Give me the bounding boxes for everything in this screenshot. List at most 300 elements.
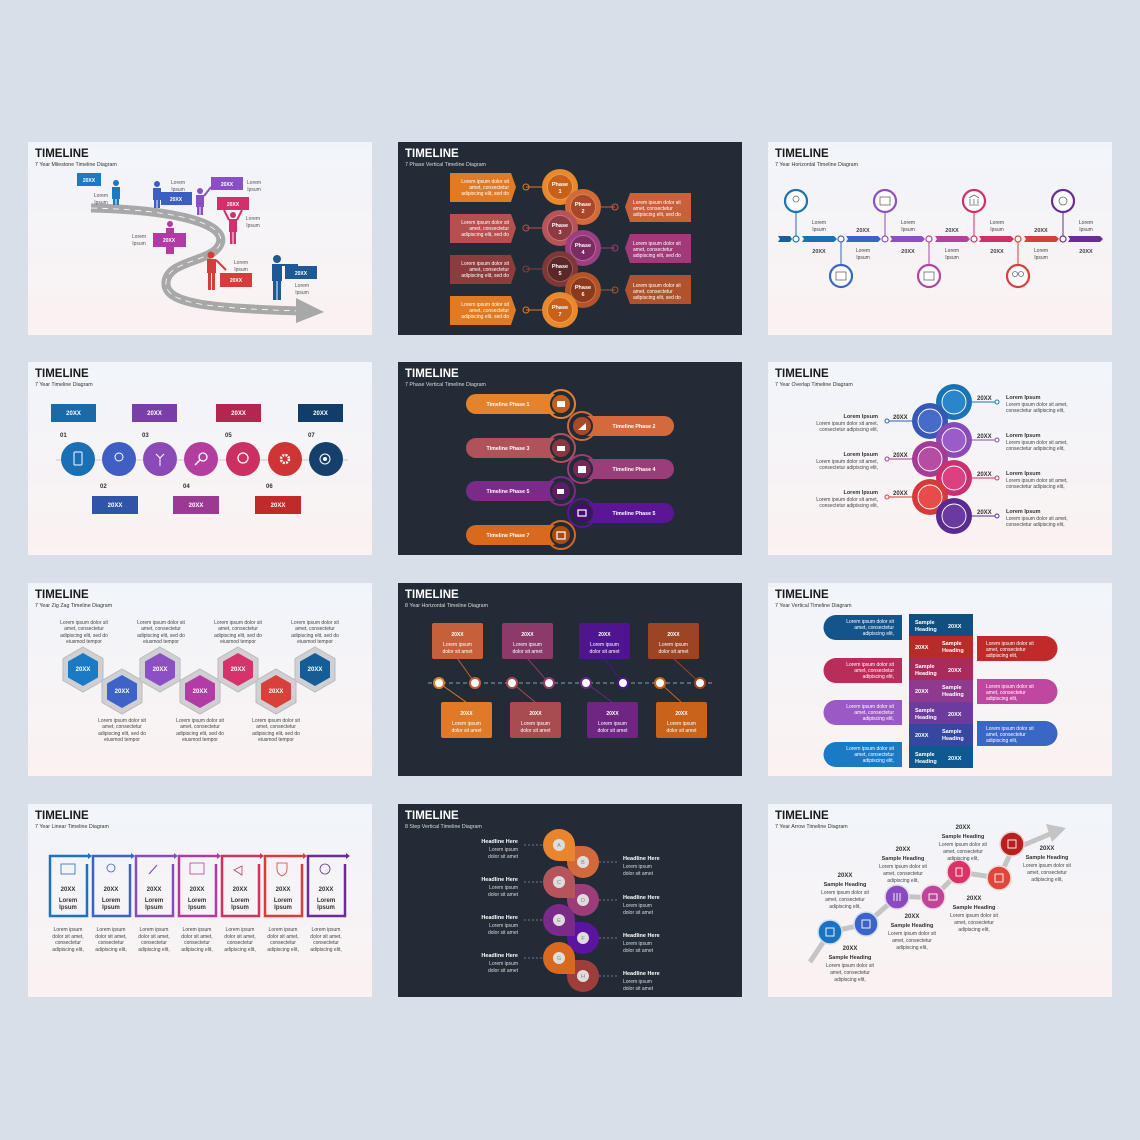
year boxes: 20XX [460, 711, 473, 717]
phase text boxes: adipiscing elit, sed do [461, 314, 509, 320]
milestone figures and labels: Ipsum [132, 241, 146, 247]
timeline labels: 20XX [901, 249, 915, 255]
phase circles: Phase [575, 285, 591, 291]
phase circles: Phase [552, 305, 568, 311]
slide 11 title [405, 810, 482, 830]
milestone figures and labels: Ipsum [234, 267, 248, 273]
phase circles: 7 [558, 312, 562, 318]
slide 7: zig zag hexagons [28, 583, 372, 776]
milestone labels: 20XX [967, 896, 981, 902]
slide 1 title: TIMELINE [35, 148, 89, 160]
slide 6 title: 7 Year Overlap Timeline Diagram [775, 382, 853, 388]
slide 7 title: 7 Year Zig Zag Timeline Diagram [35, 603, 113, 609]
year boxes: Lorem ipsum [659, 642, 688, 648]
teardrop steps: E [557, 918, 561, 924]
side pills: Lorem ipsum dolor sit [986, 684, 1034, 690]
year boxes: 20XX [521, 632, 534, 638]
road with arrow [91, 208, 324, 323]
year boxes: 20XX [231, 411, 246, 417]
connectors and labels: Lorem ipsum dolor sit amet, [816, 421, 878, 427]
phase pills: Timeline Phase 4 [613, 467, 655, 473]
milestone labels: adipiscing elit, [834, 977, 866, 983]
box descriptions: consectetur [270, 940, 296, 946]
box descriptions: dolor sit amet, [224, 934, 256, 940]
box descriptions: adipiscing elit, [224, 947, 256, 953]
slide 9 title: 7 Year Vertical Timeline Diagram [775, 603, 852, 609]
year boxes with arrows: 20XX [104, 887, 118, 893]
milestone labels: 20XX [838, 873, 852, 879]
milestone labels: 20XX [956, 825, 970, 831]
hexagon descriptions: amet, consectetur [180, 724, 220, 730]
box descriptions: dolor sit amet, [267, 934, 299, 940]
side pills: amet, consectetur [986, 690, 1026, 696]
slide 7 title [35, 589, 113, 609]
phase text boxes: adipiscing elit, sed do [461, 273, 509, 279]
milestone figures and labels: Lorem [132, 234, 146, 240]
year boxes: Lorem ipsum [452, 721, 481, 727]
central column rows: 20XX [948, 624, 962, 630]
timeline labels: 20XX [812, 249, 826, 255]
year boxes: 20XX [66, 411, 81, 417]
slide 3 title [775, 148, 859, 168]
phase text boxes: Lorem ipsum dolor sit [461, 302, 510, 308]
box descriptions: adipiscing elit, [181, 947, 213, 953]
slide 12 title: 7 Year Arrow Timeline Diagram [775, 824, 848, 830]
year boxes with arrows: Ipsum [145, 905, 163, 911]
slide 6 title [775, 368, 853, 388]
milestone labels: 20XX [905, 914, 919, 920]
hexagon descriptions: Lorem ipsum dolor sit [98, 718, 147, 724]
hexagon descriptions: adipiscing elit, sed do [137, 633, 185, 639]
milestone labels: adipiscing elit, [829, 904, 861, 910]
hexagon descriptions: Lorem ipsum dolor sit [252, 718, 301, 724]
slide 3 title: 7 Year Horizontal Timeline Diagram [775, 162, 859, 168]
phase text boxes: Lorem ipsum dolor sit [633, 283, 681, 289]
timeline labels: 20XX [1034, 228, 1048, 234]
central column rows: Sample [915, 664, 935, 670]
slide 2 title: TIMELINE [405, 148, 459, 160]
year boxes: 20XX [606, 711, 619, 717]
phase pills: Timeline Phase 5 [613, 511, 655, 517]
phase text boxes: amet, consectetur [469, 267, 509, 273]
headline texts: Lorem ipsum [623, 903, 652, 909]
slide 5 title [405, 368, 487, 388]
headline texts: Lorem ipsum [489, 961, 518, 967]
hexagon descriptions: adipiscing elit, sed do [98, 731, 146, 737]
step numbers: 04 [183, 484, 190, 490]
phase icon circles [547, 390, 596, 549]
side pills: amet, consectetur [854, 625, 894, 631]
side pills: amet, consectetur [854, 668, 894, 674]
connectors and labels: Lorem Ipsum [1006, 395, 1041, 401]
teardrop steps [543, 829, 599, 992]
slide 9: vertical timeline with sample headings [768, 583, 1112, 776]
connectors and labels: consectetur adipiscing elit, [1006, 408, 1065, 414]
year boxes: Lorem ipsum [590, 642, 619, 648]
side pills: Lorem ipsum dolor sit [986, 641, 1034, 647]
slide 3: horizontal timeline with pins [768, 142, 1112, 335]
timeline labels: 20XX [856, 228, 870, 234]
milestone labels: Lorem ipsum dolor sit [826, 963, 875, 969]
slide 12 title: TIMELINE [775, 810, 829, 822]
year boxes with arrows: 20XX [276, 887, 290, 893]
connectors and labels: consectetur adipiscing elit, [819, 465, 878, 471]
slide 8: 8 year horizontal (dark) [398, 583, 742, 776]
milestone labels: Lorem ipsum dolor sit [879, 864, 928, 870]
year boxes with arrows: 20XX [190, 887, 204, 893]
timeline labels: Ipsum [1034, 255, 1048, 261]
milestone figures and labels: 20XX [230, 278, 243, 284]
phase text boxes: Lorem ipsum dolor sit [461, 179, 510, 185]
timeline labels: Ipsum [901, 227, 915, 233]
phase circles: Phase [552, 223, 568, 229]
milestone figures and labels: 20XX [163, 238, 176, 244]
hexagon descriptions: eiusmod tempor [66, 639, 102, 645]
central column rows: Sample [915, 752, 935, 758]
headline texts: dolor sit amet [488, 930, 519, 936]
year boxes: dolor sit amet [520, 728, 551, 734]
hexagon descriptions: amet, consectetur [218, 626, 258, 632]
slide 5 title: TIMELINE [405, 368, 459, 380]
milestone labels: Sample Heading [891, 923, 933, 929]
phase pills: Timeline Phase 1 [487, 402, 529, 408]
year boxes: 20XX [108, 503, 122, 509]
hexagon descriptions: amet, consectetur [64, 626, 104, 632]
slide 2: 7 phase vertical (dark) [398, 142, 742, 335]
box descriptions: Lorem ipsum [97, 927, 125, 933]
central column rows: 20XX [915, 689, 929, 695]
year boxes: 20XX [271, 503, 285, 509]
milestone figures and labels: Ipsum [295, 290, 309, 296]
slide 4 title: TIMELINE [35, 368, 89, 380]
slide 4 title: 7 Year Timeline Diagram [35, 382, 93, 388]
milestone labels: amet, consectetur [825, 897, 865, 903]
phase pills [466, 394, 674, 545]
box descriptions: consectetur [98, 940, 124, 946]
year boxes: Lorem ipsum [598, 721, 627, 727]
box descriptions [52, 927, 342, 953]
box descriptions: consectetur [141, 940, 167, 946]
year boxes with arrows: Ipsum [317, 905, 335, 911]
slide 12 title [775, 810, 848, 830]
box descriptions: adipiscing elit, [52, 947, 84, 953]
hexagon descriptions: eiusmod tempor [182, 737, 218, 743]
step circles with icons [56, 442, 348, 476]
box descriptions: Lorem ipsum [54, 927, 82, 933]
side pills: Lorem ipsum dolor sit [986, 726, 1034, 732]
timeline bar segments [778, 236, 1103, 242]
teardrop steps: F [581, 936, 585, 942]
milestone labels: Lorem ipsum dolor sit [950, 913, 999, 919]
box descriptions: dolor sit amet, [52, 934, 84, 940]
year boxes with arrows: 20XX [233, 887, 247, 893]
phase circles [523, 169, 618, 328]
headline texts: dolor sit amet [488, 892, 519, 898]
slide 10: linear timeline boxes [28, 804, 372, 997]
milestone figures and labels: Lorem [234, 260, 248, 266]
side pills: amet, consectetur [854, 752, 894, 758]
headline texts: Lorem ipsum [489, 923, 518, 929]
milestone figures and labels: Lorem [246, 216, 260, 222]
headline texts: dolor sit amet [623, 948, 654, 954]
phase circles: Phase [575, 243, 591, 249]
hexagons: 20XX [115, 689, 129, 695]
phase text boxes: adipiscing elit, sed do [633, 253, 681, 259]
milestone labels: 20XX [843, 946, 857, 952]
connectors and labels: 20XX [977, 510, 992, 516]
hexagon descriptions: amet, consectetur [295, 626, 335, 632]
milestone labels: Lorem ipsum dolor sit [1023, 863, 1072, 869]
milestone figures and labels: Lorem [247, 180, 261, 186]
teardrop steps: G [557, 956, 561, 962]
side pills: adipiscing elit, [986, 653, 1017, 659]
hexagon descriptions: adipiscing elit, sed do [252, 731, 300, 737]
year boxes: dolor sit amet [597, 728, 628, 734]
hexagons: 20XX [308, 667, 322, 673]
slide 8 title [405, 589, 489, 609]
milestone labels: amet, consectetur [883, 871, 923, 877]
phase circles: 2 [581, 209, 585, 215]
connectors and labels: Lorem Ipsum [843, 452, 878, 458]
slide 1: milestone timeline [28, 142, 372, 335]
connectors and dashed line [428, 658, 714, 702]
central column rows: 20XX [948, 668, 962, 674]
connectors and labels: 20XX [977, 472, 992, 478]
headline texts [481, 839, 660, 992]
hexagons: 20XX [76, 667, 90, 673]
year boxes with arrows: Ipsum [59, 905, 77, 911]
hexagon descriptions [60, 620, 340, 743]
box descriptions: dolor sit amet, [138, 934, 170, 940]
year boxes: Lorem ipsum [521, 721, 550, 727]
side pills [824, 615, 1058, 767]
central column rows: Heading [942, 736, 964, 742]
milestone figures and labels: Ipsum [246, 223, 260, 229]
central column rows: Heading [915, 715, 937, 721]
slide 8 title: TIMELINE [405, 589, 459, 601]
rising arrow [810, 824, 1066, 962]
timeline labels: Lorem [990, 220, 1004, 226]
year boxes with arrows: Ipsum [274, 905, 292, 911]
side pills: Lorem ipsum dolor sit [846, 704, 895, 710]
headline texts: Headline Here [623, 933, 660, 939]
year boxes: dolor sit amet [658, 649, 689, 655]
side pills: adipiscing elit, [986, 696, 1017, 702]
milestone labels: amet, consectetur [954, 920, 994, 926]
side pills: adipiscing elit, [863, 674, 894, 680]
hexagon descriptions: eiusmod tempor [258, 737, 294, 743]
timeline dots [434, 678, 705, 688]
headline texts: dolor sit amet [488, 854, 519, 860]
side pills: amet, consectetur [854, 710, 894, 716]
timeline labels: Lorem [812, 220, 826, 226]
box descriptions: consectetur [313, 940, 339, 946]
phase text boxes: Lorem ipsum dolor sit [461, 220, 510, 226]
milestone labels: Sample Heading [824, 882, 866, 888]
year boxes with arrows: 20XX [319, 887, 333, 893]
timeline labels [812, 220, 1093, 261]
milestone labels: Sample Heading [942, 834, 984, 840]
milestone labels: Lorem ipsum dolor sit [888, 931, 937, 937]
milestone labels: Lorem ipsum dolor sit [939, 842, 988, 848]
teardrop steps: D [581, 898, 585, 904]
side pills: Lorem ipsum dolor sit [846, 619, 895, 625]
milestone figures and labels: 20XX [170, 197, 183, 203]
central column rows: Heading [942, 648, 964, 654]
headline texts: dolor sit amet [623, 871, 654, 877]
headline texts: Headline Here [481, 877, 518, 883]
connectors and labels: consectetur adipiscing elit, [819, 503, 878, 509]
slide 10 title [35, 810, 109, 830]
slide 10 title: TIMELINE [35, 810, 89, 822]
slide 11 title: 8 Step Vertical Timeline Diagram [405, 824, 482, 830]
connectors and labels: consectetur adipiscing elit, [1006, 484, 1065, 490]
timeline labels: Lorem [1034, 248, 1048, 254]
phase text boxes: amet, consectetur [469, 185, 509, 191]
phase pills: Timeline Phase 2 [613, 424, 655, 430]
year boxes with arrows: Lorem [274, 898, 292, 904]
milestone labels: 20XX [896, 847, 910, 853]
milestone labels: Sample Heading [953, 905, 995, 911]
hexagon descriptions: Lorem ipsum dolor sit [214, 620, 263, 626]
headline texts: dolor sit amet [623, 986, 654, 992]
year boxes: Lorem ipsum [443, 642, 472, 648]
connectors and labels: Lorem ipsum dolor sit amet, [1006, 478, 1068, 484]
milestone labels: amet, consectetur [943, 849, 983, 855]
year boxes with arrows: Lorem [59, 898, 77, 904]
year boxes with arrows: Lorem [231, 898, 249, 904]
overlapping circles [912, 384, 972, 534]
headline texts: Headline Here [481, 915, 518, 921]
year boxes with arrows: Lorem [102, 898, 120, 904]
year boxes with arrows: 20XX [61, 887, 75, 893]
milestone figures and labels [77, 173, 317, 300]
hexagon descriptions: adipiscing elit, sed do [176, 731, 224, 737]
hexagons: 20XX [231, 667, 245, 673]
hexagon descriptions: eiusmod tempor [297, 639, 333, 645]
pins with icons [785, 190, 1074, 287]
box descriptions: dolor sit amet, [181, 934, 213, 940]
hexagon descriptions: adipiscing elit, sed do [214, 633, 262, 639]
hexagons: 20XX [153, 667, 167, 673]
step numbers: 05 [225, 433, 232, 439]
connectors and labels: Lorem Ipsum [1006, 471, 1041, 477]
central column rows [909, 614, 973, 768]
milestone figures and labels: Lorem [171, 180, 185, 186]
year boxes with arrows: Ipsum [231, 905, 249, 911]
central column rows: Sample [942, 729, 962, 735]
year boxes: 20XX [529, 711, 542, 717]
milestone labels [821, 825, 1072, 983]
connectors and labels: Lorem Ipsum [1006, 509, 1041, 515]
connectors and labels: consectetur adipiscing elit, [819, 427, 878, 433]
milestone labels: Lorem ipsum dolor sit [821, 890, 870, 896]
headline texts: Headline Here [623, 856, 660, 862]
year boxes: 20XX [675, 711, 688, 717]
milestone figures and labels: Ipsum [94, 200, 108, 206]
connectors and labels [816, 395, 1068, 528]
milestone figures and labels: 20XX [221, 182, 234, 188]
year boxes with arrows: Lorem [188, 898, 206, 904]
year boxes with arrows: Ipsum [102, 905, 120, 911]
slide 8 title: 8 Year Horizontal Timeline Diagram [405, 603, 489, 609]
side pills: adipiscing elit, [986, 738, 1017, 744]
year boxes with arrows: Lorem [145, 898, 163, 904]
phase pills: Timeline Phase 3 [487, 446, 529, 452]
timeline labels: 20XX [990, 249, 1004, 255]
slide 12: arrow timeline [768, 804, 1112, 997]
hexagon descriptions: amet, consectetur [102, 724, 142, 730]
milestone labels: adipiscing elit, [1031, 877, 1063, 883]
hexagon descriptions: Lorem ipsum dolor sit [176, 718, 225, 724]
phase circles: 6 [581, 292, 585, 298]
year boxes: 20XX [313, 411, 328, 417]
step numbers: 06 [266, 484, 273, 490]
year boxes: 20XX [451, 632, 464, 638]
hexagon descriptions: eiusmod tempor [143, 639, 179, 645]
central column rows: Sample [942, 641, 962, 647]
headline texts: Lorem ipsum [489, 885, 518, 891]
box descriptions: Lorem ipsum [226, 927, 254, 933]
side pills: adipiscing elit, [863, 631, 894, 637]
milestone figures and labels: Ipsum [171, 187, 185, 193]
milestone figures and labels: Ipsum [247, 187, 261, 193]
timeline labels: Lorem [945, 248, 959, 254]
year boxes: dolor sit amet [589, 649, 620, 655]
box descriptions: consectetur [55, 940, 81, 946]
phase circles: 3 [558, 230, 562, 236]
phase text boxes: adipiscing elit, sed do [633, 212, 681, 218]
central column rows: Heading [942, 692, 964, 698]
dashed connectors [524, 845, 618, 976]
year boxes with arrows: Ipsum [188, 905, 206, 911]
milestone figures and labels: Lorem [94, 193, 108, 199]
timeline labels: 20XX [1079, 249, 1093, 255]
milestone labels: adipiscing elit, [887, 878, 919, 884]
slide 6: overlap circles timeline [768, 362, 1112, 555]
timeline labels: Ipsum [856, 255, 870, 261]
milestone labels: 20XX [1040, 846, 1054, 852]
central column rows: Sample [915, 708, 935, 714]
year boxes with arrows: Lorem [317, 898, 335, 904]
hexagon descriptions: amet, consectetur [141, 626, 181, 632]
step numbers [60, 433, 315, 490]
box descriptions: adipiscing elit, [267, 947, 299, 953]
step numbers: 01 [60, 433, 67, 439]
phase text boxes: amet, consectetur [633, 289, 673, 295]
milestone labels: amet, consectetur [892, 938, 932, 944]
connectors and labels: consectetur adipiscing elit, [1006, 522, 1065, 528]
year boxes with arrows: 20XX [147, 887, 161, 893]
step numbers: 07 [308, 433, 315, 439]
connectors and labels: Lorem ipsum dolor sit amet, [1006, 516, 1068, 522]
milestone figures and labels: Lorem [295, 283, 309, 289]
slide 2 title: 7 Phase Vertical Timeline Diagram [405, 162, 487, 168]
box descriptions: adipiscing elit, [138, 947, 170, 953]
slide 4 title [35, 368, 93, 388]
hexagons: 20XX [269, 689, 283, 695]
teardrop steps: A [557, 843, 561, 849]
connectors and labels: 20XX [893, 453, 908, 459]
side pills: amet, consectetur [986, 647, 1026, 653]
milestone circles [818, 832, 1024, 944]
year boxes: 20XX [598, 632, 611, 638]
phase text boxes: adipiscing elit, sed do [461, 191, 509, 197]
hexagon descriptions: Lorem ipsum dolor sit [60, 620, 109, 626]
side pills: adipiscing elit, [863, 716, 894, 722]
milestone figures and labels: 20XX [83, 178, 96, 184]
box descriptions: dolor sit amet, [310, 934, 342, 940]
